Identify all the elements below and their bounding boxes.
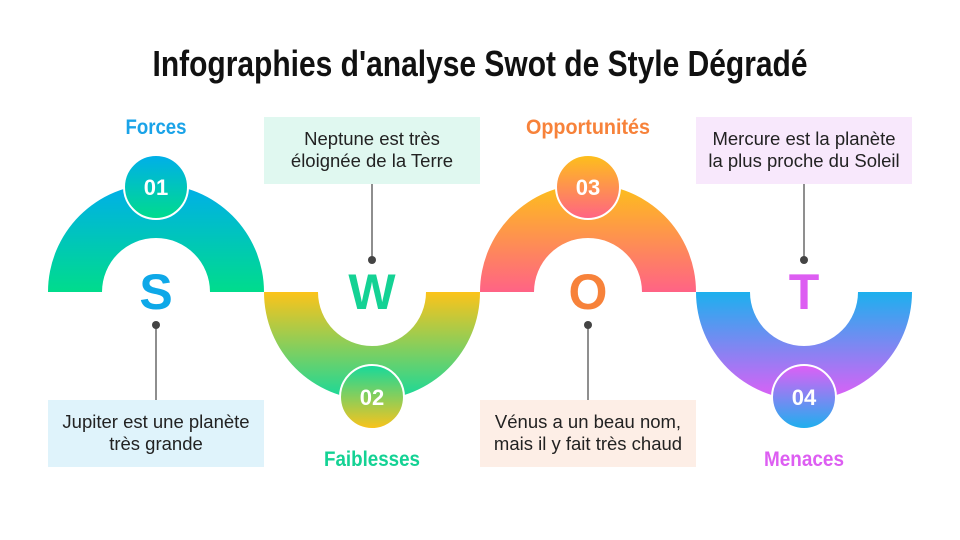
- arc W: [264, 292, 480, 400]
- text box O: Vénus a un beau nom,: [495, 411, 681, 432]
- badge 02: 02: [360, 385, 384, 410]
- text box W: [264, 117, 480, 184]
- badge 04: [772, 365, 836, 429]
- text box W: éloignée de la Terre: [291, 150, 453, 171]
- letter W: W: [348, 264, 396, 320]
- letter T: T: [789, 264, 819, 320]
- text box S: très grande: [109, 433, 203, 454]
- letter O: O: [569, 264, 607, 320]
- arc T: [696, 292, 912, 400]
- text box S: [48, 400, 264, 467]
- text box W: Neptune est très: [304, 128, 440, 149]
- connector S: [152, 321, 160, 400]
- arc O: [480, 184, 696, 292]
- heading Opportunites: Opportunités: [526, 116, 650, 139]
- text box S: Jupiter est une planète: [62, 411, 250, 432]
- text box T: la plus proche du Soleil: [708, 150, 900, 171]
- text box T: Mercure est la planète: [712, 128, 896, 149]
- badge 03: [556, 155, 620, 219]
- heading Forces: Forces: [126, 116, 186, 139]
- panel: O opportunites: [480, 116, 696, 467]
- text box O: mais il y fait très chaud: [494, 433, 682, 454]
- heading Faiblesses: Faiblesses: [324, 448, 420, 471]
- badge 02: [340, 365, 404, 429]
- connector O: [584, 321, 592, 400]
- panel: W faiblesses: [264, 117, 480, 471]
- badge 01: [124, 155, 188, 219]
- letter S: S: [139, 264, 173, 320]
- badge 03: 03: [576, 175, 600, 200]
- connector W: [368, 184, 376, 264]
- panel: T menaces: [696, 117, 912, 471]
- connector T: [800, 184, 808, 264]
- title: Infographies d'analyse Swot de Style Dégradé: [152, 43, 808, 84]
- panel: S forces: [48, 116, 264, 467]
- text box O: [480, 400, 696, 467]
- badge 01: 01: [144, 175, 168, 200]
- arc S: [48, 184, 264, 292]
- heading Menaces: Menaces: [764, 448, 844, 471]
- text box T: [696, 117, 912, 184]
- badge 04: 04: [792, 385, 817, 410]
